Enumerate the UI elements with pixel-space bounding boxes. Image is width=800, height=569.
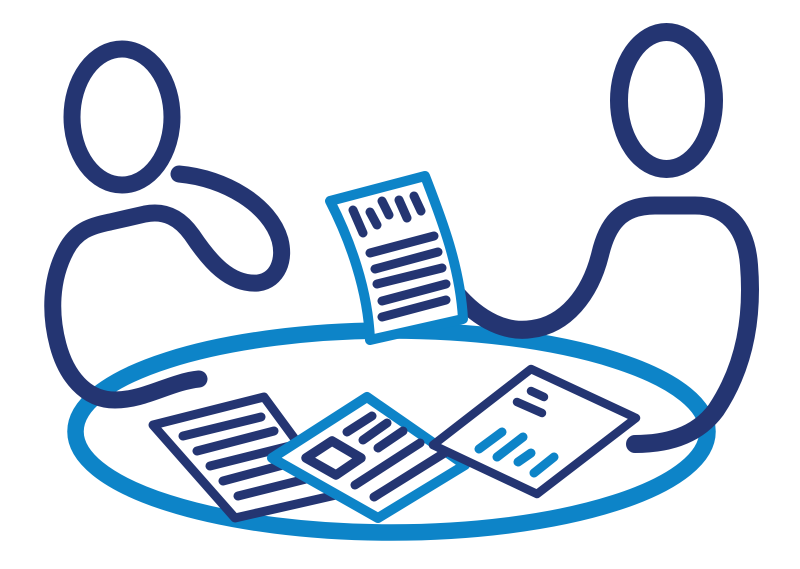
center document [272, 397, 465, 518]
bottom left document [153, 397, 336, 518]
right person body and arm [455, 206, 750, 444]
table ellipse [76, 330, 708, 532]
left person body and arm [53, 174, 282, 400]
held document [330, 176, 463, 340]
left person [53, 49, 282, 400]
left person head [72, 49, 172, 185]
right person head [619, 32, 714, 169]
bottom right document [433, 369, 636, 494]
right person [455, 32, 750, 444]
image placeholder [306, 441, 361, 475]
